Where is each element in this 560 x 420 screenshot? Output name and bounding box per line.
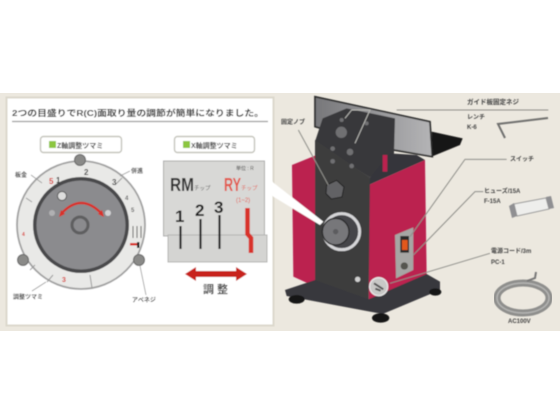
adjustment wheel (322, 214, 360, 250)
label: wrench: レンチ (467, 115, 485, 121)
tip scale chart (164, 161, 267, 262)
label: voltage: AC100V (508, 319, 531, 325)
red body right (369, 160, 427, 303)
icon: hex wrench (498, 118, 548, 138)
tip scale chart: RM (170, 175, 194, 195)
label: adjust: 調整 (203, 282, 231, 296)
feet (289, 288, 441, 323)
dial: 4 (125, 196, 129, 202)
base (285, 274, 440, 314)
switch plate (395, 227, 413, 278)
callout: adjust knob label: 調整ツマミ (13, 293, 43, 301)
callout: fine scale label (120, 167, 143, 176)
dial: 4 (22, 232, 25, 238)
dial (17, 154, 145, 289)
red lever (383, 155, 387, 172)
dial: 5 (49, 177, 54, 186)
dial: 3 (112, 178, 117, 187)
fixing bolts (330, 118, 369, 168)
callout: fine scale label: 併進 (131, 167, 143, 175)
tip scale chart: RY (224, 175, 241, 195)
gray back plate (315, 97, 432, 157)
dark inner disc (33, 177, 129, 273)
dark top of housing (369, 153, 425, 185)
callout: page label: アベネジ (132, 296, 156, 304)
tip scale chart: 単位 : R (236, 165, 254, 172)
panel: adjustment diagram (6, 98, 274, 326)
top block (315, 108, 395, 177)
small gauge (133, 226, 141, 238)
tip scale chart: チップ (241, 185, 258, 192)
label: fixing knob: 固定ノブ (281, 118, 305, 126)
red body left (292, 155, 317, 287)
callout: adjust knob label (13, 282, 46, 301)
callout: page label (132, 266, 156, 304)
fixing knob (326, 180, 344, 199)
power socket (370, 278, 388, 296)
label: guide plate screw: ガイド板固定ネジ (467, 97, 520, 106)
label: switch: スイッチ (510, 155, 534, 163)
arrow: adjust direction (185, 267, 247, 281)
icon: fuse (509, 196, 554, 218)
tip scale chart: 2 (195, 201, 204, 220)
dial: 2 (84, 168, 89, 177)
dial: 3 (62, 277, 66, 284)
label: power cord: 電源コード/3m (491, 249, 531, 255)
screws (74, 154, 86, 166)
label: X axis knob: X軸調整ツマミ (191, 141, 238, 150)
icon: power cord (497, 272, 549, 313)
tip scale chart: (1~2) (236, 198, 250, 204)
label: fuse: F-15A (484, 199, 501, 205)
callout: scale label (15, 171, 42, 183)
scale numbers: 1 (56, 176, 61, 185)
label: power cord: PC-1 (491, 260, 505, 266)
callout: scale label: 板金 (15, 171, 27, 179)
machine (267, 97, 548, 323)
label: Z axis knob (40, 136, 122, 152)
leader lines (298, 110, 548, 283)
tip scale chart: 3 (214, 198, 223, 217)
pointer from dial (267, 177, 323, 225)
tip scale chart: 1 (175, 207, 184, 226)
black guide wedge (432, 132, 463, 157)
label: fuse: ヒューズ/15A (484, 189, 520, 195)
screw (355, 277, 360, 282)
parts list (281, 97, 534, 325)
label: X axis knob (174, 136, 254, 152)
background band (0, 93, 560, 331)
heading: 2つの目盛りでR(C)面取り量の調節が簡単になりました。 (12, 107, 264, 118)
center column (315, 140, 370, 303)
tip scale chart: チップ (194, 185, 211, 192)
dial: 5 (131, 208, 135, 214)
red adjustment arc (61, 203, 102, 214)
outer ring (17, 161, 145, 289)
label: wrench: K-6 (467, 125, 477, 131)
label: Z axis knob: Z軸調整ツマミ (57, 141, 103, 150)
